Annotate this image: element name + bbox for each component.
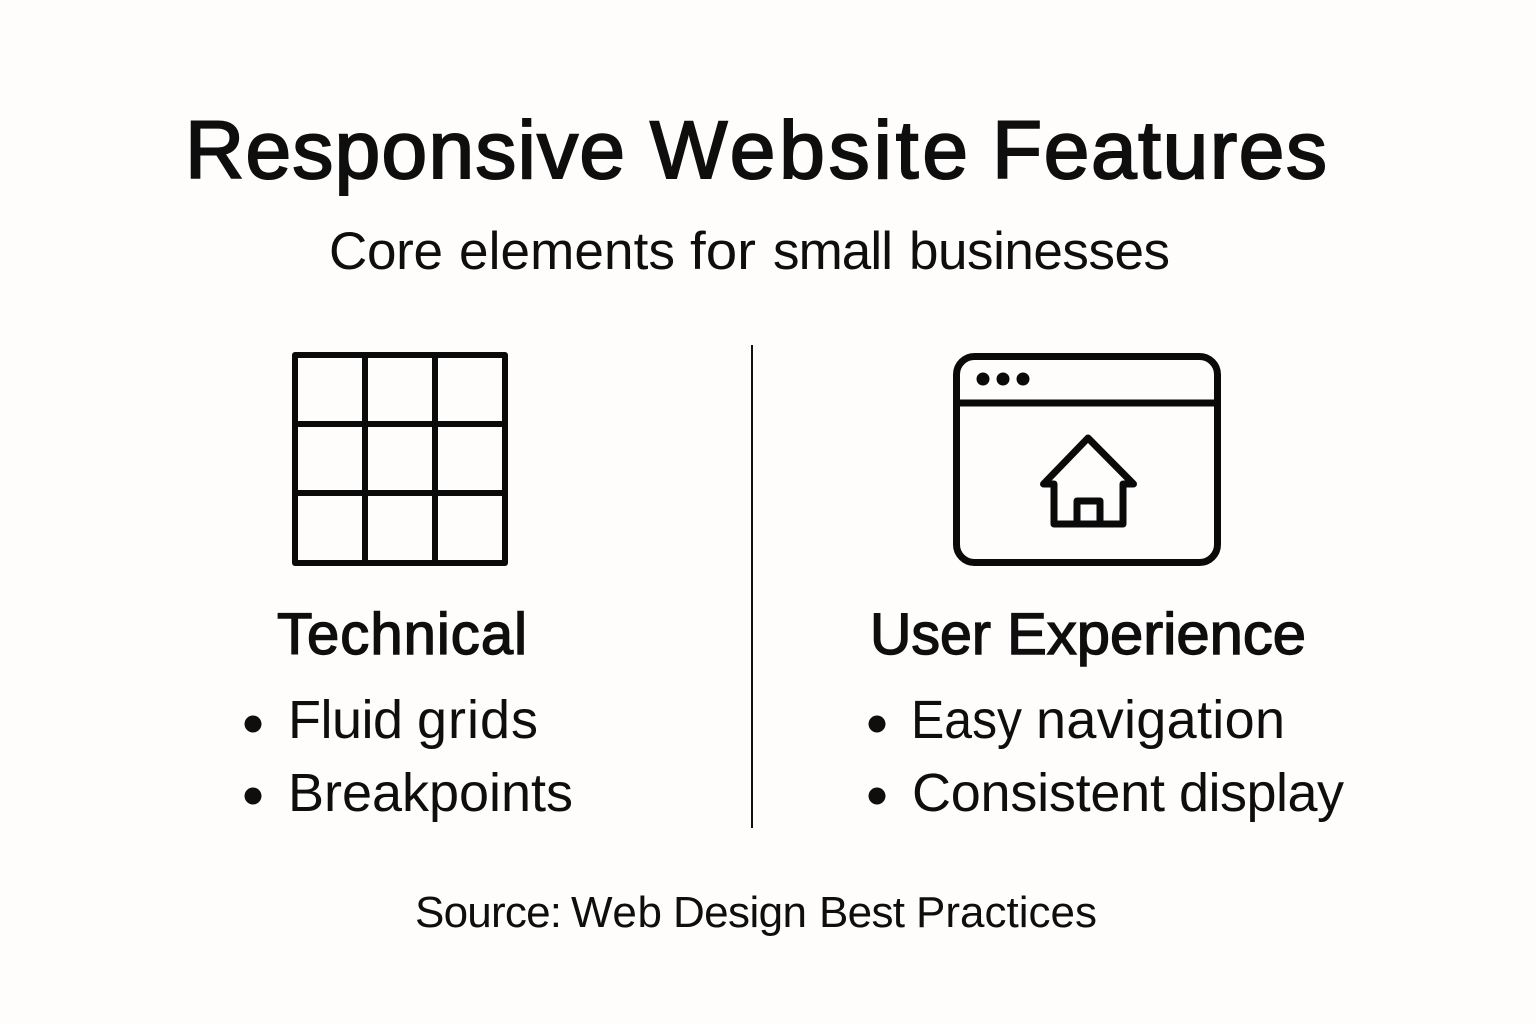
list: user experience features xyxy=(868,690,1344,823)
heading: User Experience: User xyxy=(870,602,991,667)
source note: Source: xyxy=(415,888,562,937)
subtitle: small xyxy=(773,222,893,281)
heading: User Experience: Experience xyxy=(1007,602,1306,667)
divider line xyxy=(751,345,753,828)
title: Features xyxy=(992,105,1327,196)
list: user experience features: Easy xyxy=(911,690,1022,750)
subtitle: Core xyxy=(329,222,443,281)
list: technical features: Fluid xyxy=(288,690,403,750)
list: user experience features: Consistent xyxy=(912,763,1165,823)
source note xyxy=(415,888,1097,937)
list: technical features xyxy=(244,690,573,823)
source note: Web xyxy=(571,888,662,937)
icon: browser window with house xyxy=(956,356,1218,562)
title: Website xyxy=(650,105,968,196)
source note: Best xyxy=(819,888,905,937)
source note: Design xyxy=(673,888,807,937)
title xyxy=(185,105,1327,196)
list: user experience features: display xyxy=(1179,763,1344,823)
heading: Technical: Technical xyxy=(277,602,527,667)
list: technical features: grids xyxy=(417,690,538,750)
list: user experience features: navigation xyxy=(1036,690,1285,750)
title: Responsive xyxy=(185,105,625,196)
icon: grid xyxy=(295,355,505,563)
subtitle: for xyxy=(690,222,756,281)
subtitle xyxy=(329,222,1170,281)
heading: User Experience xyxy=(870,602,1306,667)
list: technical features: Breakpoints xyxy=(288,763,573,823)
subtitle: elements xyxy=(459,222,675,281)
subtitle: businesses xyxy=(909,222,1170,281)
source note: Practices xyxy=(916,888,1097,937)
